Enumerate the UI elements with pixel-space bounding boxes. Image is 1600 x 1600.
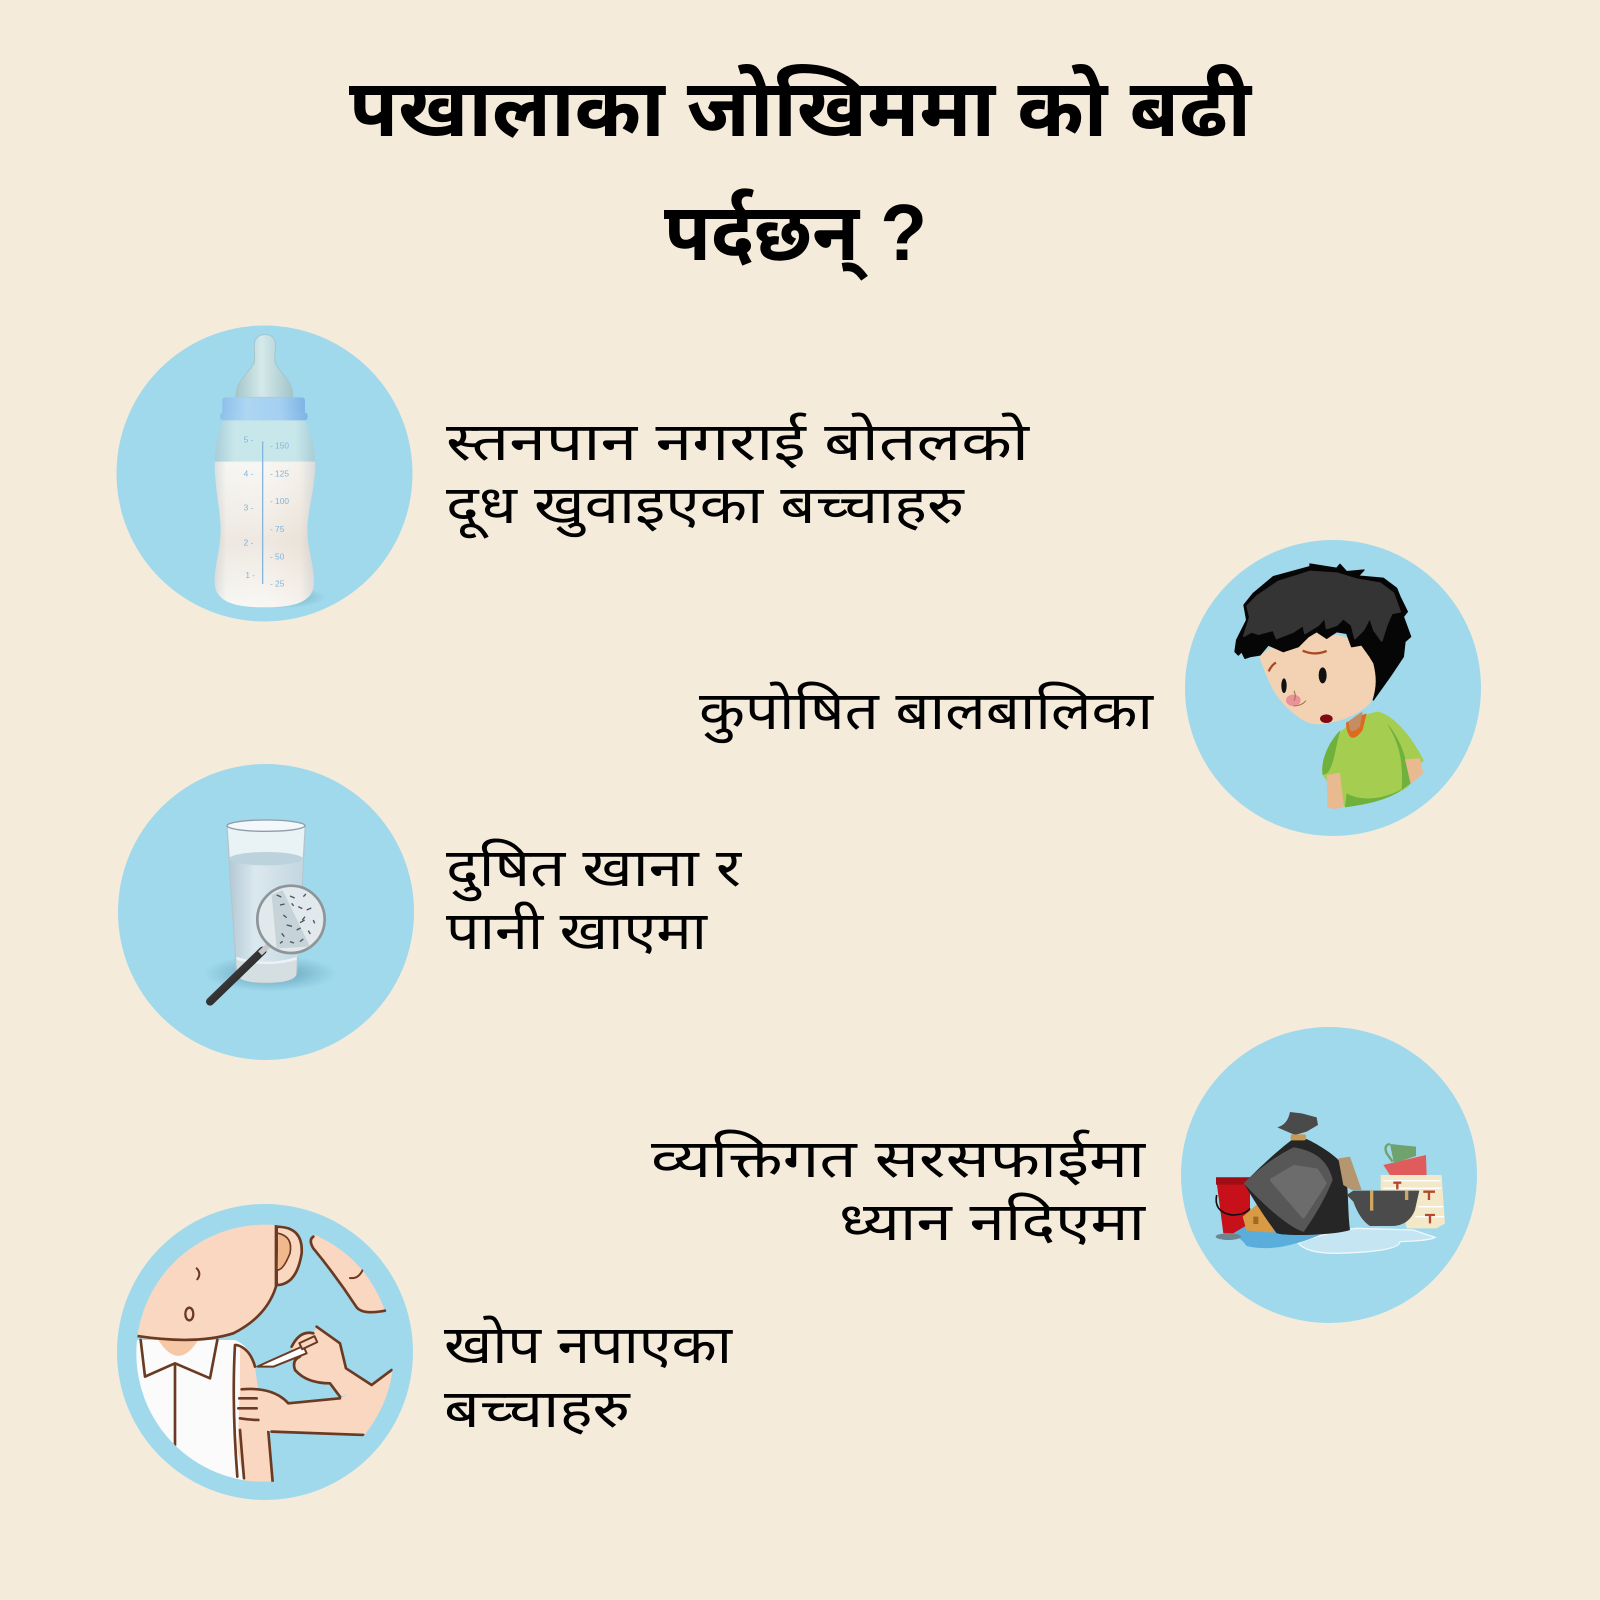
label: bottle-fed children: स्तनपान नगराई बोतलको (446, 412, 1031, 472)
title (349, 64, 1252, 281)
panel: poor hygiene (651, 1027, 1477, 1323)
icon: sad boy (1235, 564, 1424, 809)
icon: baby bottle: - 50 (270, 551, 285, 561)
icon: baby bottle (215, 334, 327, 609)
icon circle: glass (118, 764, 414, 1060)
icon: glass and magnifier (203, 820, 337, 1002)
label: poor hygiene: ध्यान नदिएमा (839, 1192, 1147, 1252)
panel: malnourished children (699, 540, 1481, 836)
icon circle: bottle (116, 326, 412, 622)
icon circle: vaccine (117, 1204, 413, 1500)
icon: baby bottle: - 25 (270, 579, 285, 589)
icon: baby bottle: 1 - (245, 570, 255, 580)
label: contaminated food and water: पानी खाएमा (446, 901, 708, 961)
title: पर्दछन् ? (664, 188, 927, 281)
icon: baby bottle: - 125 (270, 469, 289, 479)
label: unvaccinated children (444, 1315, 733, 1439)
panel: contaminated food and water (118, 764, 743, 1060)
label: unvaccinated children: खोप नपाएका (444, 1315, 733, 1375)
icon: baby bottle: 5 - (244, 435, 254, 445)
icon: baby bottle: 2 - (244, 537, 254, 547)
icon: baby bottle: 4 - (244, 469, 254, 479)
label: poor hygiene (651, 1129, 1147, 1252)
panel: unvaccinated children (117, 1204, 733, 1500)
label: contaminated food and water: दुषित खाना र (446, 838, 743, 902)
icon: garbage bag and dirty dishes (1216, 1112, 1445, 1253)
icon: child receiving vaccination (133, 1223, 393, 1483)
title: पखालाका जोखिममा को बढी (349, 64, 1252, 153)
icon: baby bottle: - 75 (270, 524, 285, 534)
panel: bottle-fed children (116, 326, 1031, 622)
label: bottle-fed children: दूध खुवाइएका बच्चाहरु (446, 476, 966, 539)
icon circle: garbage (1181, 1027, 1477, 1323)
label: malnourished children: कुपोषित बालबालिका (699, 681, 1154, 744)
label: contaminated food and water (446, 838, 743, 961)
icon: baby bottle: - 150 (270, 441, 289, 451)
label: unvaccinated children: बच्चाहरु (444, 1380, 632, 1439)
icon: baby bottle: 3 - (244, 503, 254, 513)
label: poor hygiene: व्यक्तिगत सरसफाईमा (651, 1129, 1147, 1189)
label: bottle-fed children (446, 412, 1031, 539)
icon circle: boy (1185, 540, 1481, 836)
icon: baby bottle: - 100 (270, 496, 289, 506)
